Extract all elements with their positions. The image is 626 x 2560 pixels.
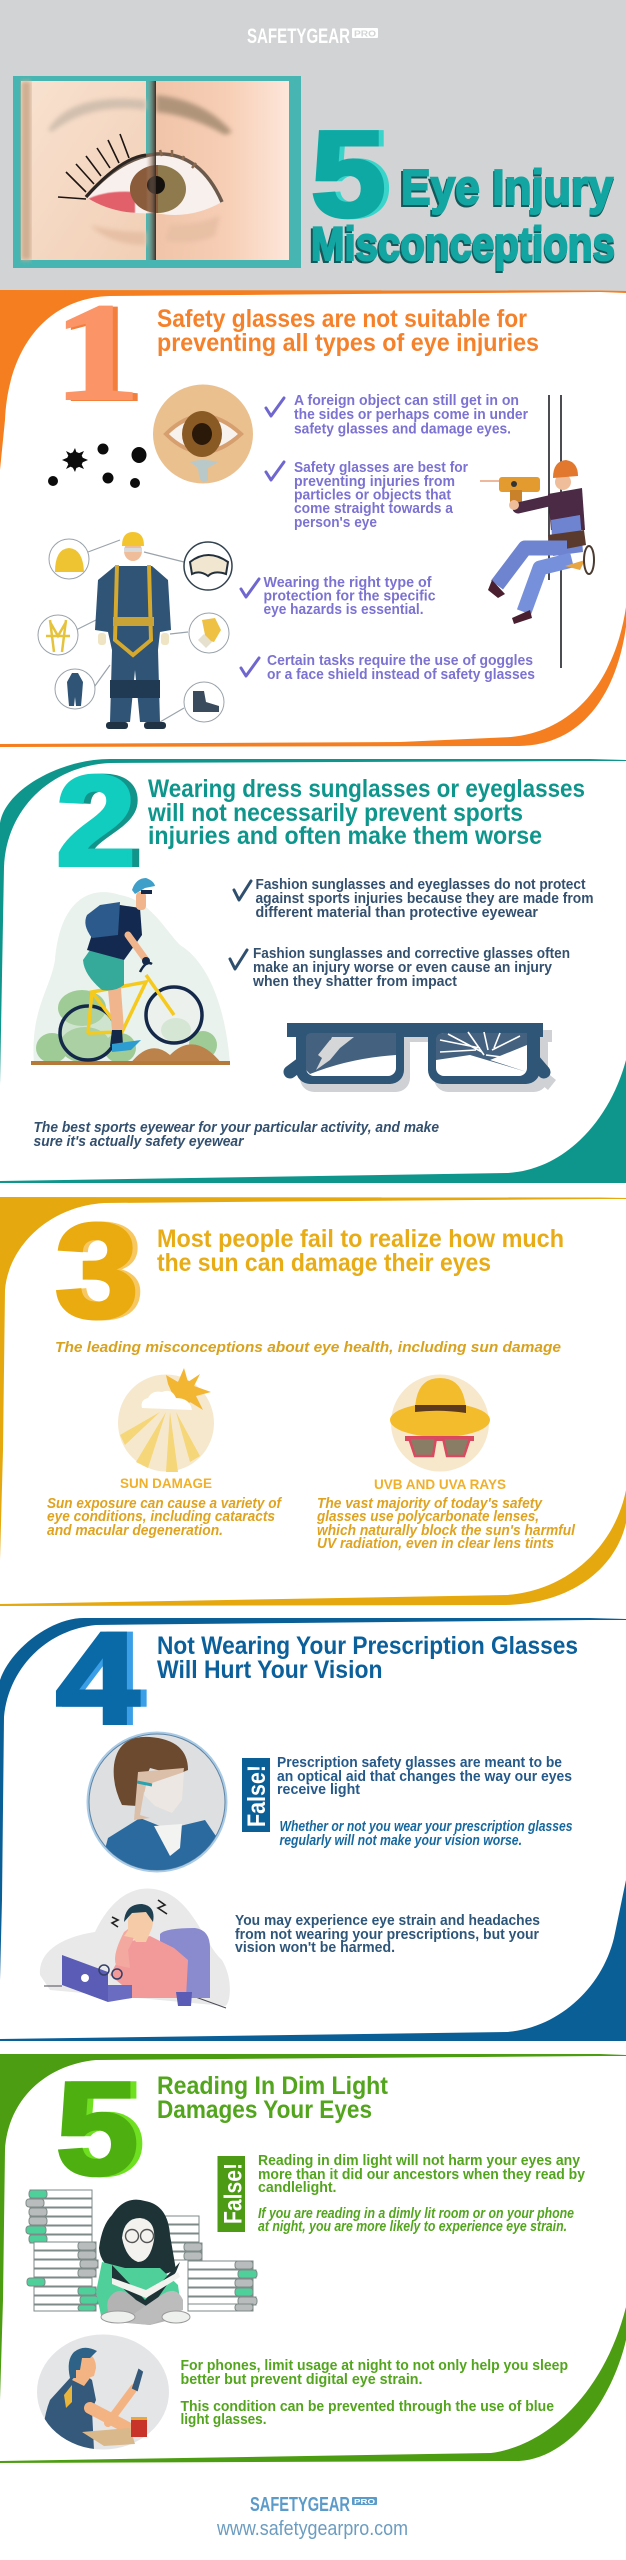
illustration: broken glasses — [287, 1023, 556, 1092]
icon: germs — [48, 444, 146, 488]
illustration: PPE worker — [38, 532, 232, 729]
False badge 5: False! — [220, 2163, 248, 2224]
block: UVB and UVA rays: UV radiation, even in clear lens tints — [317, 1536, 554, 1552]
panel: misconception 4 — [0, 1605, 626, 2041]
panel: misconception 3 — [0, 1196, 626, 1606]
numeral 4: 4 — [56, 1605, 139, 1751]
block: UVB and UVA rays: The vast majority of today's safety — [317, 1496, 543, 1512]
heading 4: Will Hurt Your Vision — [157, 1656, 382, 1684]
bullet: no protection — [234, 877, 594, 921]
bullet: best for particles: Safety glasses are best for — [294, 460, 468, 476]
icon: irritated eye — [153, 384, 253, 484]
bullet: best for particles: particles or objects that — [294, 488, 451, 504]
heading 2: will not necessarily prevent sports — [147, 799, 523, 827]
False badge 4: False! — [243, 1765, 271, 1827]
numeral 3: 3 — [60, 1196, 143, 1346]
numeral 1: 1 — [53, 275, 140, 430]
block: sun damage: eye conditions, including cataracts — [47, 1509, 275, 1525]
text: dim light harmless: Reading in dim light will not harm your eyes any — [258, 2153, 580, 2169]
panel: misconception 5 — [0, 2054, 626, 2463]
heading 2: Wearing dress sunglasses or eyeglasses — [148, 775, 585, 803]
numeral 2: 2 — [63, 749, 143, 892]
text: eye strain in dim rooms: at night, you are more likely to experience eye strain. — [258, 2219, 567, 2235]
photo: masked worker — [86, 1732, 228, 1875]
text: optical aid: Prescription safety glasses are meant to be — [277, 1755, 562, 1771]
big numeral 5: 5 — [316, 107, 391, 243]
circle: boots — [184, 682, 224, 722]
block: sun damage: Sun exposure can cause a variety of — [47, 1496, 283, 1512]
icon: hat and sunglasses — [390, 1374, 490, 1472]
icon: sun and cloud — [118, 1368, 214, 1472]
subheading 3: The leading misconceptions about eye health, including sun damage — [55, 1340, 561, 1356]
glasses shadow — [300, 1030, 556, 1092]
header logo: SAFETYGEAR — [247, 25, 350, 48]
block: sun damage — [47, 1475, 283, 1539]
bullet: right protection: protection for the specific — [264, 588, 436, 604]
heading 5: Damages Your Eyes — [157, 2096, 372, 2124]
circle: coverall suit — [55, 669, 95, 709]
website: www.safetygearpro.com — [216, 2518, 408, 2540]
heading 1: Safety glasses are not suitable for — [157, 305, 527, 333]
numeral 4: 4 — [62, 1605, 145, 1751]
text: phone advice: This condition can be prevented through the use of blue — [180, 2399, 554, 2415]
block: sun damage: and macular degeneration. — [47, 1523, 223, 1539]
numeral 5: 5 — [56, 2054, 138, 2202]
heading 3: the sun can damage their eyes — [157, 1249, 491, 1277]
circle: harness — [38, 615, 78, 655]
text: eye strain in dim rooms: If you are reading in a dimly lit room or on your phone — [258, 2206, 574, 2222]
heading 2 — [147, 775, 585, 850]
text: will not worsen vision: Whether or not you wear your prescription glasses — [280, 1819, 572, 1835]
circle: gloves — [189, 613, 229, 653]
numeral 2: 2 — [56, 749, 136, 892]
text: phone advice: light glasses. — [180, 2412, 266, 2428]
circle: goggles — [184, 542, 232, 590]
text: dim light harmless — [258, 2153, 585, 2196]
text: phone advice: better but prevent digital eye strain. — [180, 2372, 422, 2388]
bullet: goggles or face shield: or a face shield instead of safety glasses — [267, 667, 535, 683]
hero title — [309, 107, 615, 272]
heading 5 — [157, 2072, 389, 2124]
bullet: worse injury: make an injury worse or even cause an injury — [253, 960, 552, 976]
text: eye strain in dim rooms — [258, 2206, 574, 2235]
bullet: foreign object: the sides or perhaps come in under — [294, 407, 528, 423]
worker figure — [95, 532, 171, 729]
bullet: best for particles: person's eye — [294, 515, 377, 531]
heading 2: injuries and often make them worse — [148, 822, 542, 850]
bullet: foreign object — [266, 393, 528, 438]
panel: misconception 2 — [0, 749, 626, 1183]
circle: helmet — [49, 539, 89, 579]
panel: misconception 1 — [0, 275, 626, 747]
block: UVB and UVA rays: UVB AND UVA RAYS — [374, 1476, 506, 1492]
text: eye strain and headaches: vision won't be harmed. — [235, 1940, 395, 1956]
bullet: best for particles — [266, 460, 468, 531]
numeral 1: 1 — [58, 276, 145, 431]
bullet: best for particles: preventing injuries from — [294, 474, 455, 490]
takeaway note 2: The best sports eyewear for your particular activity, and make — [34, 1120, 439, 1136]
text: optical aid: an optical aid that changes the way our eyes — [277, 1769, 572, 1785]
heading 4: Not Wearing Your Prescription Glasses — [157, 1632, 578, 1660]
heading 4 — [157, 1632, 578, 1684]
bullet: goggles or face shield — [241, 653, 535, 683]
text: dim light harmless: more than it did our ancestors when they read by — [258, 2167, 585, 2183]
illustration: climber with drill — [480, 395, 594, 668]
illustration: girl reading with book stacks — [26, 2190, 257, 2325]
text: optical aid: receive light — [277, 1782, 360, 1798]
text: phone advice: For phones, limit usage at night to not only help you sleep — [180, 2358, 568, 2374]
bullet: no protection: Fashion sunglasses and eyeglasses do not protect — [256, 877, 586, 893]
bullet: right protection — [241, 575, 436, 618]
bullet: best for particles: come straight towards a — [294, 501, 454, 517]
text: will not worsen vision — [280, 1819, 572, 1849]
takeaway note 2: sure it's actually safety eyewear — [34, 1134, 245, 1150]
rider — [83, 878, 155, 1052]
block: UVB and UVA rays: which naturally block the sun's harmful — [317, 1523, 576, 1539]
text: optical aid — [277, 1755, 572, 1798]
bullet: foreign object: safety glasses and damage eyes. — [294, 422, 511, 438]
bullet: worse injury — [230, 946, 570, 990]
heading 1 — [157, 305, 539, 357]
heading 3 — [157, 1225, 564, 1277]
bullet: no protection: different material than protective eyewear — [256, 905, 538, 921]
numeral 3: 3 — [55, 1196, 138, 1346]
takeaway note 2 — [34, 1120, 439, 1150]
illustration: man with eye strain — [40, 1888, 230, 2008]
footer logo: PRO — [354, 2499, 376, 2506]
book stacks — [26, 2190, 257, 2311]
text: phone advice — [180, 2358, 568, 2428]
heading 3: Most people fail to realize how much — [157, 1225, 564, 1253]
illustration: cyclist — [31, 878, 230, 1065]
bullet: goggles or face shield: Certain tasks require the use of goggles — [267, 653, 533, 669]
footer logo: SAFETYGEAR — [250, 2494, 350, 2516]
text: eye strain and headaches: You may experience eye strain and headaches — [235, 1913, 540, 1929]
bullet: worse injury: Fashion sunglasses and corrective glasses often — [253, 946, 570, 962]
bullet: foreign object: A foreign object can still get in on — [294, 393, 519, 409]
hero photo: split eye — [13, 76, 301, 268]
block: UVB and UVA rays: glasses use polycarbonate lenses, — [316, 1509, 539, 1525]
text: eye strain and headaches: from not wearing your prescriptions, but your — [235, 1927, 539, 1943]
block: UVB and UVA rays — [316, 1476, 576, 1552]
footer — [216, 2494, 408, 2540]
bullet: right protection: Wearing the right type of — [264, 575, 432, 591]
header band — [0, 0, 626, 291]
heading 5: Reading In Dim Light — [157, 2072, 389, 2100]
text: dim light harmless: candlelight. — [258, 2180, 336, 2196]
bicycle — [60, 963, 202, 1060]
block: sun damage: SUN DAMAGE — [120, 1475, 212, 1491]
numeral 5: 5 — [62, 2054, 144, 2202]
bullet: right protection: eye hazards is essential. — [264, 602, 424, 618]
header logo: PRO — [354, 30, 376, 38]
heading 1: preventing all types of eye injuries — [157, 329, 539, 357]
text: eye strain and headaches — [235, 1913, 540, 1956]
bullet: no protection: against sports injuries because they are made from — [256, 891, 594, 907]
bullet: worse injury: when they shatter from impact — [252, 974, 457, 990]
big numeral 5: 5 — [311, 107, 386, 243]
text: will not worsen vision: regularly will not make your vision worse. — [280, 1833, 522, 1849]
girl — [96, 2200, 190, 2325]
illustration: man using phone — [37, 2334, 169, 2450]
